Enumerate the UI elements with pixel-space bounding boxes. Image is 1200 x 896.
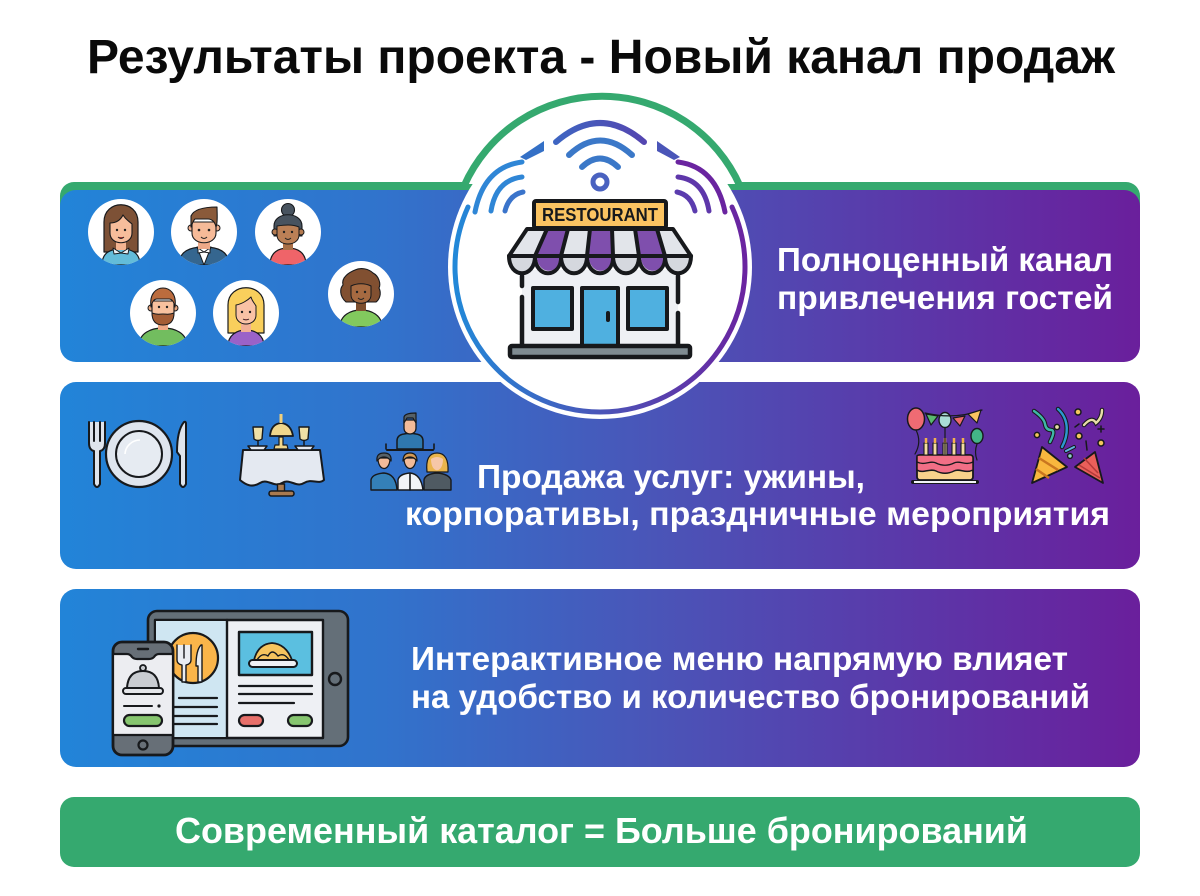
footer banner (60, 797, 1140, 867)
icon: tablet with menu and phone (113, 611, 348, 755)
avatar: woman with brown hair (88, 199, 154, 265)
icon: wifi signal (475, 123, 725, 212)
avatar: blonde woman (213, 280, 279, 346)
panel text: services: корпоративы, праздничные мероприятия (405, 495, 1110, 532)
badge background (448, 96, 752, 419)
icon: restaurant building (509, 201, 691, 357)
panel text: services (405, 458, 1110, 532)
panel: services (60, 382, 1140, 569)
avatar: man in suit (171, 199, 237, 265)
central badge: restaurant with wifi (448, 96, 752, 419)
sign: RESTOURANT (542, 205, 658, 225)
panel: interactive menu (60, 589, 1140, 767)
icon: party poppers (1032, 409, 1104, 483)
icon: birthday cake and balloons (908, 408, 983, 482)
sign (534, 201, 666, 228)
panel: guest acquisition channel (60, 182, 1140, 362)
panel text: guest channel: Полноценный канал (777, 241, 1113, 278)
panel text: guest channel (777, 241, 1113, 316)
avatar: woman with hair bun (255, 199, 321, 265)
footer banner: Современный каталог = Больше бронирований (175, 810, 1028, 851)
icon: corporate team (371, 413, 451, 490)
avatar: person with curly hair (328, 261, 394, 327)
icon: plate and cutlery (89, 421, 186, 487)
panel text: interactive menu (411, 640, 1090, 715)
panel text: services: Продажа услуг: ужины, (477, 458, 865, 495)
avatar: man with beard (130, 280, 196, 346)
panel text: interactive menu: Интерактивное меню напрямую влияет (411, 640, 1068, 677)
title: Результаты проекта - Новый канал продаж (87, 30, 1116, 84)
awning (509, 229, 691, 273)
panel text: guest channel: привлечения гостей (777, 279, 1113, 316)
panel text: interactive menu: на удобство и количество бронирований (411, 678, 1090, 715)
icon: banquet table (240, 414, 324, 496)
